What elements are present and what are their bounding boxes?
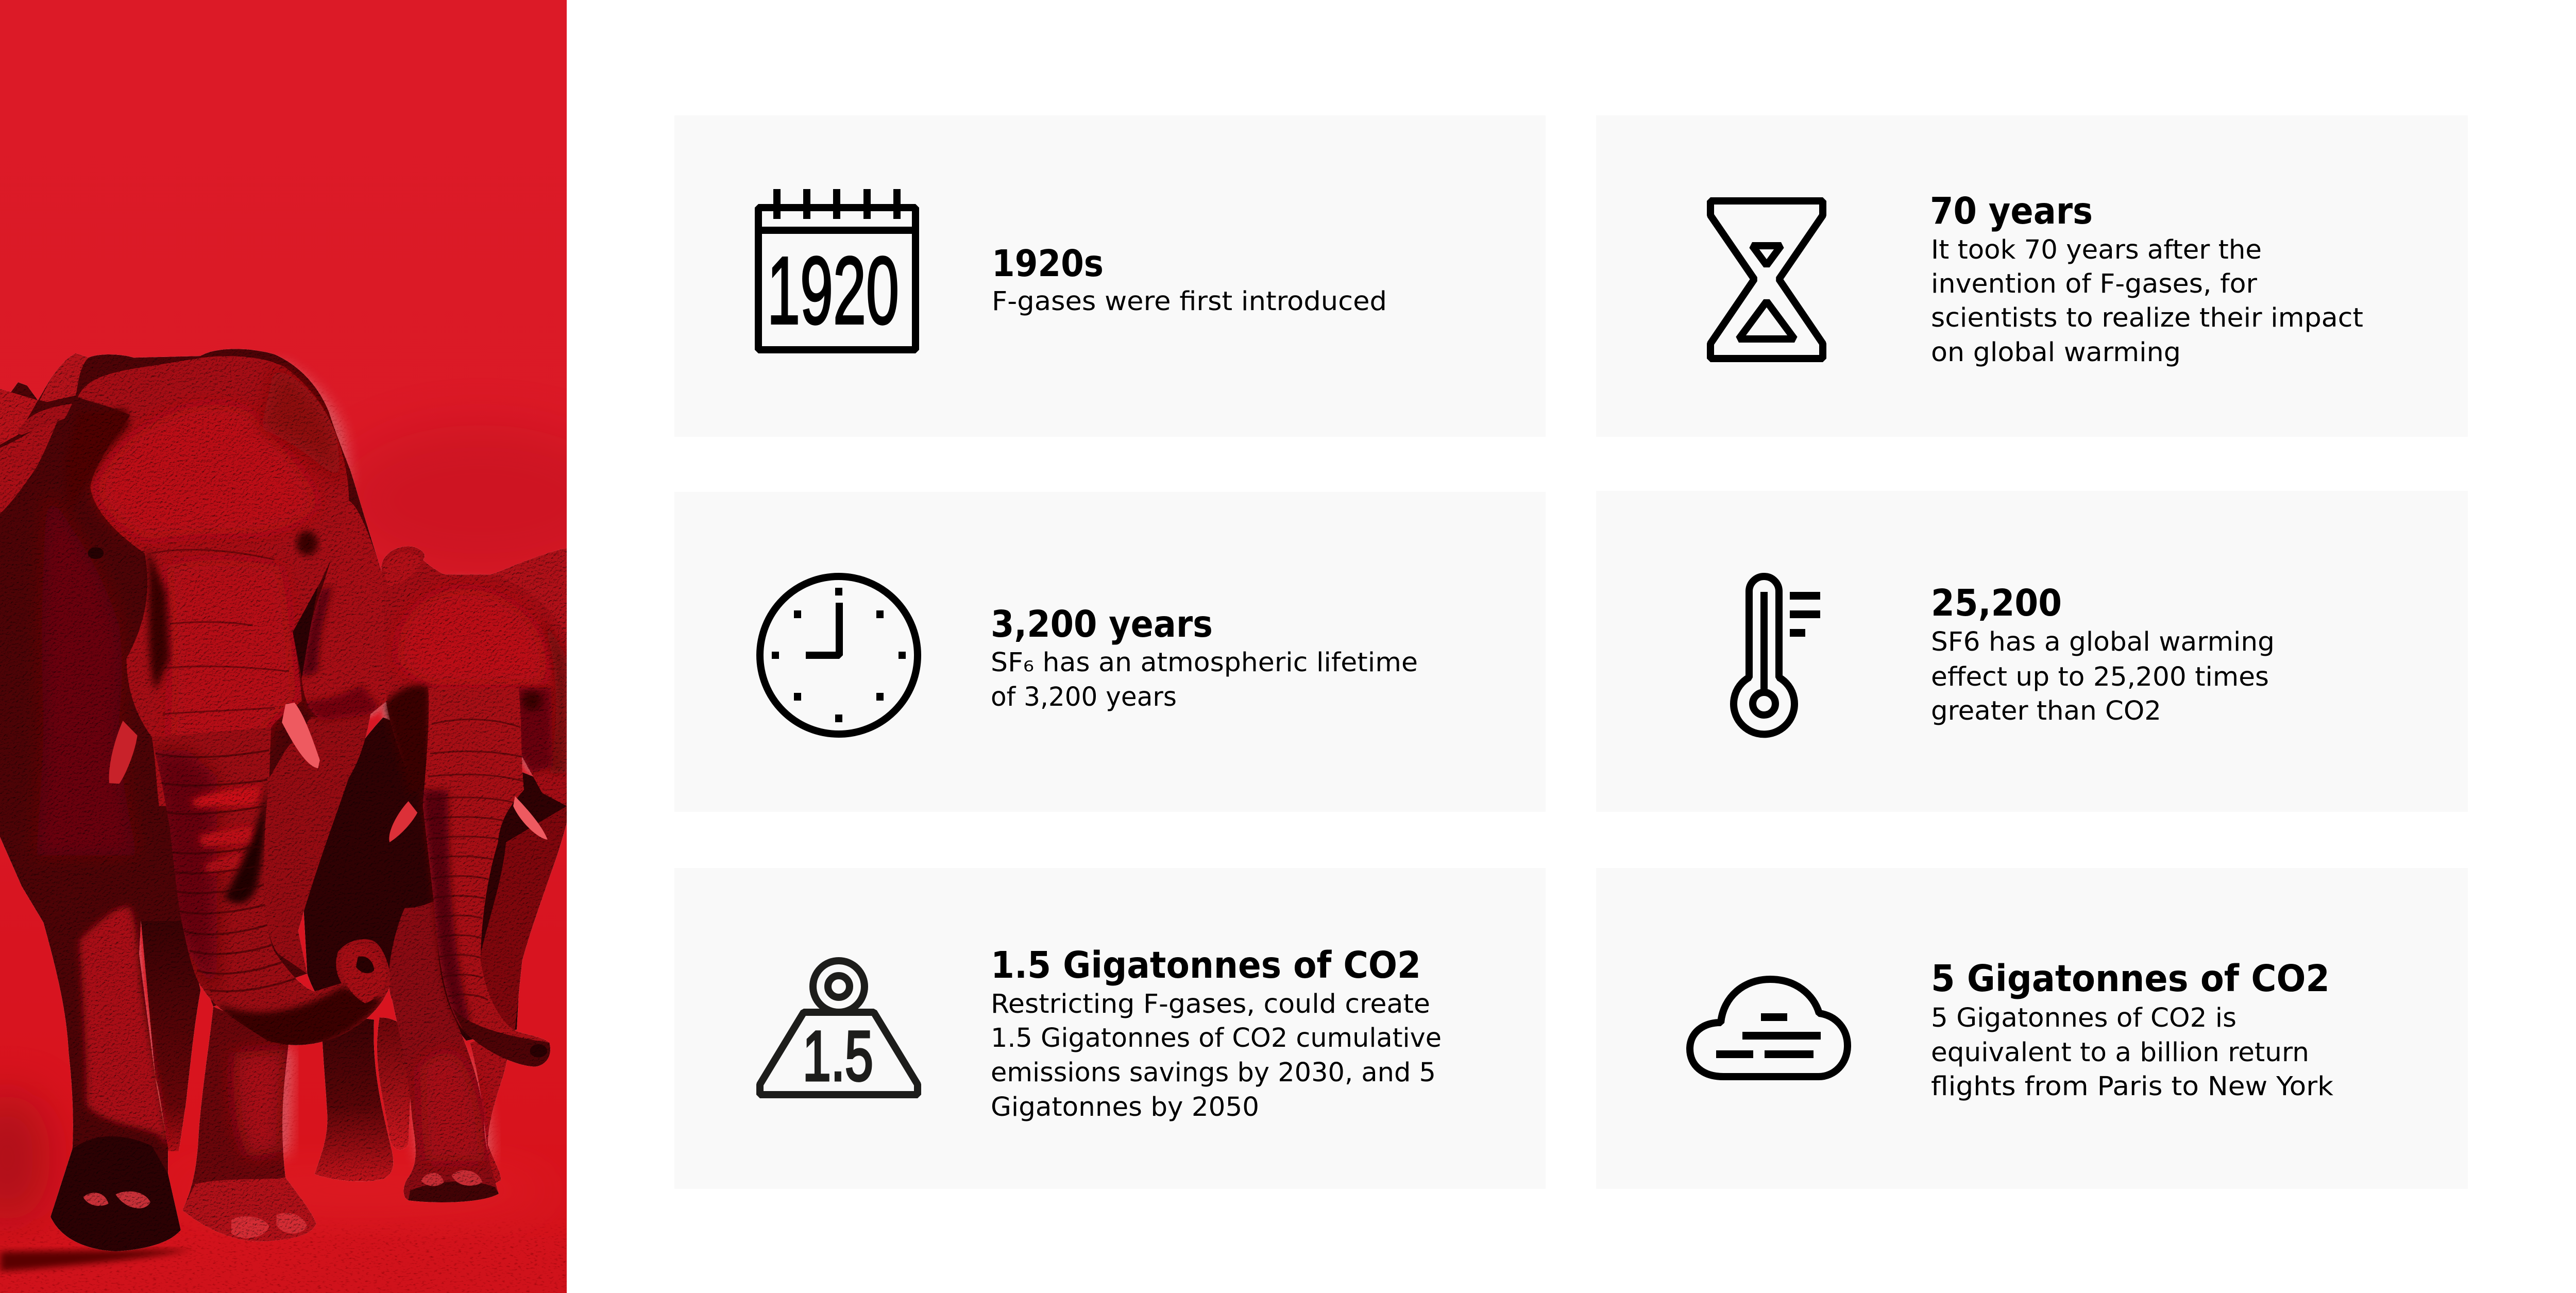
text: 70 years description: invention of F-gases, for	[1931, 269, 2257, 299]
panel: 1920s card	[674, 115, 1546, 437]
card background	[1596, 868, 2468, 1189]
card background	[674, 492, 1546, 812]
small tusks	[513, 796, 548, 840]
text: warming effect	[1931, 627, 2275, 726]
panel: red elephant photo	[0, 0, 625, 1293]
text: emissions savings: Gigatonnes by 2050	[991, 1092, 1259, 1122]
panel: 25,200 card	[1596, 491, 2468, 812]
large elephant rear leg	[141, 921, 200, 1151]
text: flights equivalence	[1931, 1003, 2333, 1102]
text: flights equivalence: equivalent to a billion return	[1931, 1037, 2309, 1068]
panel: 70 years card	[1596, 115, 2468, 437]
large elephant ear	[302, 501, 387, 721]
text: atmospheric lifetime: SF₆ has an atmospheric lifetime	[991, 648, 1418, 678]
card background	[1596, 491, 2468, 812]
large elephant trunk	[152, 727, 391, 1045]
card background	[1596, 115, 2468, 437]
text: emissions savings: 1.5 Gigatonnes of CO2 cumulative	[991, 1023, 1442, 1053]
toes	[83, 1192, 150, 1209]
panel: 5 Gigatonnes card	[1596, 868, 2468, 1189]
small elephant	[300, 547, 567, 1202]
heading: 1.5 Gigatonnes of CO2: 1.5 Gigatonnes of CO2	[991, 944, 1421, 986]
heading: 3,200 years: 3,200 years	[991, 603, 1213, 645]
text: emissions savings: emissions savings by 2030, and 5	[991, 1058, 1436, 1088]
icon: calendar: 1920	[767, 237, 899, 344]
text: flights equivalence: 5 Gigatonnes of CO2 is	[1931, 1003, 2236, 1033]
text: warming effect: greater than CO2	[1931, 696, 2161, 726]
panel: 3,200 years card	[674, 492, 1546, 812]
text: emissions savings: Restricting F-gases, could create	[991, 989, 1430, 1019]
icon: calendar	[755, 189, 919, 350]
text: 70 years description: scientists to realize their impact	[1931, 303, 2363, 333]
icon: weight: 1.5	[803, 1017, 873, 1096]
large elephant shoulder	[264, 714, 370, 974]
heading: 5 Gigatonnes of CO2: 5 Gigatonnes of CO2	[1931, 957, 2330, 1000]
large elephant front leg left	[79, 907, 168, 1148]
icon: clock	[760, 576, 918, 734]
large elephant front leg right	[182, 1007, 316, 1241]
icon: thermometer	[1734, 576, 1820, 734]
text: 70 years description: It took 70 years after the	[1931, 235, 2262, 265]
text: 70 years description: on global warming	[1931, 337, 2181, 368]
panel: 1.5 Gigatonnes card	[674, 868, 1546, 1189]
large elephant head	[78, 356, 349, 806]
icon: hourglass	[1710, 201, 1823, 359]
card background	[674, 115, 1546, 437]
heading: 25,200: 25,200	[1931, 582, 2062, 624]
red background	[0, 0, 567, 1293]
icon: weight	[760, 961, 918, 1096]
text: 70 years description	[1931, 235, 2363, 368]
text: warming effect: effect up to 25,200 times	[1931, 662, 2269, 692]
dust haze and ground	[0, 425, 625, 1293]
heading: 70 years: 70 years	[1930, 190, 2093, 232]
card background	[674, 868, 1546, 1189]
heading: 1920s: 1920s	[992, 242, 1104, 285]
text: emissions savings	[991, 989, 1442, 1122]
large tusks	[282, 703, 320, 768]
icon: cloud	[1690, 979, 1848, 1077]
text: atmospheric lifetime	[991, 648, 1418, 712]
text: first introduced: F-gases were first introduced	[992, 286, 1387, 317]
text: warming effect: SF6 has a global warming	[1931, 627, 2275, 657]
large elephant body	[0, 349, 387, 1251]
text: atmospheric lifetime: of 3,200 years	[991, 682, 1177, 712]
trunk wrinkles on face	[152, 550, 289, 714]
text: flights equivalence: flights from Paris to New York	[1931, 1071, 2333, 1102]
elephants	[0, 349, 567, 1251]
